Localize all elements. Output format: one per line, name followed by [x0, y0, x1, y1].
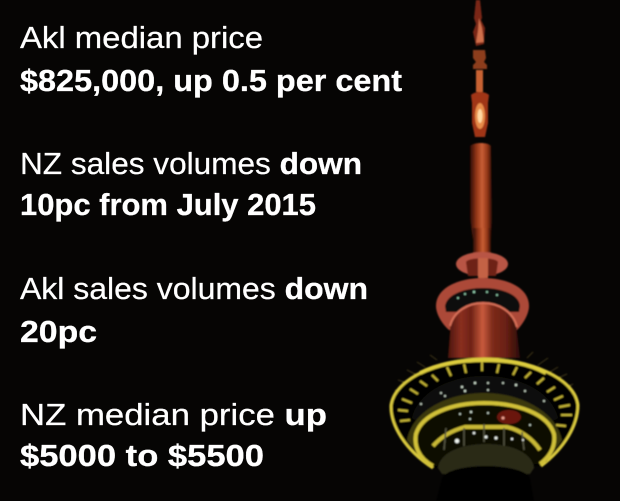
text block: Auckland median price: [20, 20, 402, 98]
line: NZ median price up: NZ median price up: [20, 397, 327, 432]
tower main observation deck: [391, 352, 578, 501]
inner yellow ring: [416, 403, 554, 466]
deck spikes: [395, 352, 573, 392]
line: Akl median price: Akl median price: [20, 20, 263, 55]
line: 10pc from July 2015: 10pc from July 2015: [20, 187, 316, 222]
illustration: Sky Tower at night: [391, 0, 578, 501]
line: NZ sales volumes down: NZ sales volumes down: [20, 146, 362, 181]
line: $825,000, up 0.5 per cent: $825,000, up 0.5 per cent: [20, 63, 402, 98]
text block: NZ median price: [20, 397, 327, 473]
tower spire: [470, 0, 492, 256]
olive band: [407, 393, 562, 462]
line: $5000 to $5500: $5000 to $5500: [20, 438, 264, 473]
text block: NZ sales volumes: [20, 146, 362, 222]
dark window band: [412, 376, 558, 421]
line: 20pc: 20pc: [20, 314, 97, 349]
text block: Auckland sales volumes: [20, 271, 368, 349]
deck spokes: [398, 362, 572, 426]
line: Akl sales volumes down: Akl sales volumes down: [20, 271, 368, 306]
lower yellow strip: [433, 427, 540, 450]
tower upper pod: [436, 252, 529, 358]
lower neck: [438, 444, 534, 474]
